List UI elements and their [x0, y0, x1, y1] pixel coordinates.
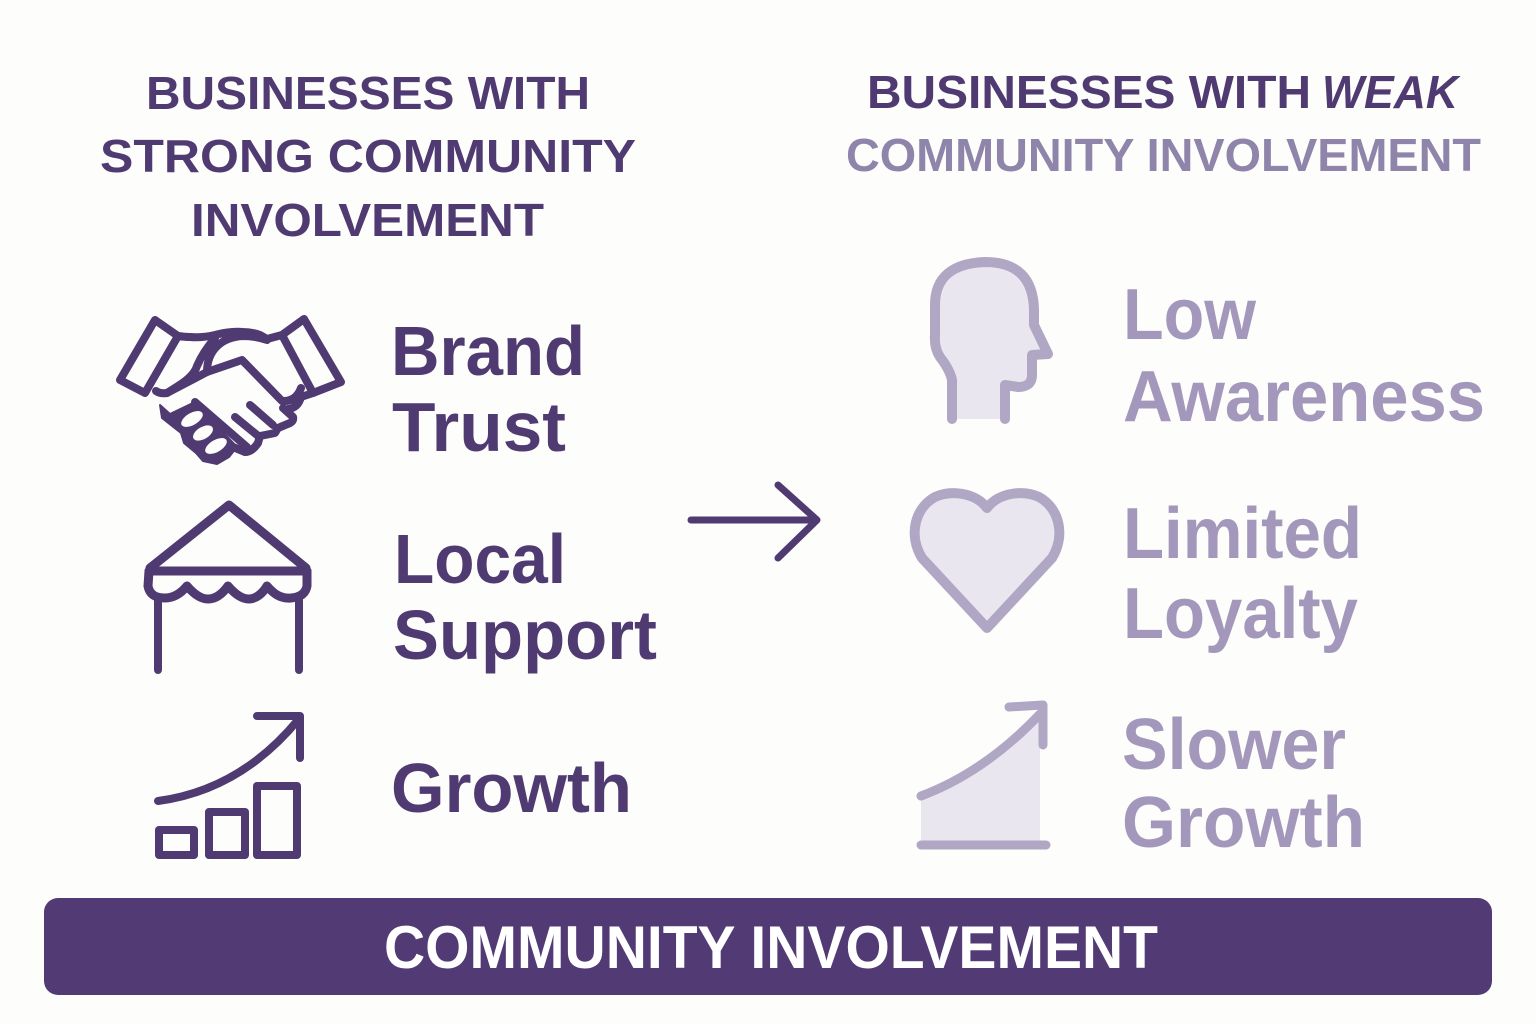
label: slower growth [1122, 705, 1365, 863]
label: low awareness: Awareness [1123, 357, 1485, 437]
icon: growth chart [158, 716, 300, 855]
label: brand trust [391, 312, 585, 466]
heading: strong involvement: INVOLVEMENT [191, 194, 544, 246]
label: limited loyalty: Limited [1123, 494, 1362, 574]
label: local support: Local [394, 520, 566, 598]
panel: strong community involvement [100, 67, 657, 855]
heading: weak involvement: COMMUNITY INVOLVEMENT [846, 129, 1481, 181]
label: limited loyalty: Loyalty [1123, 574, 1358, 654]
label: brand trust: Brand [391, 312, 585, 390]
icon: heart [915, 493, 1059, 628]
label: local support: Support [393, 596, 657, 674]
heading: weak involvement: BUSINESSES WITH [867, 66, 1311, 118]
heading: weak involvement [846, 66, 1481, 181]
banner: community involvement [44, 898, 1492, 995]
icon: handshake [120, 319, 341, 464]
label: slower growth: Growth [1122, 783, 1365, 863]
label: brand trust: Trust [392, 388, 566, 466]
arrow: strong to weak [691, 485, 817, 558]
heading: weak involvement: WEAK [1322, 66, 1461, 118]
label: limited loyalty [1123, 494, 1362, 654]
label: growth: Growth [391, 749, 632, 827]
label: slower growth: Slower [1122, 705, 1346, 785]
heading: strong involvement: BUSINESSES WITH [146, 67, 590, 119]
panel: weak community involvement [846, 66, 1485, 863]
label: low awareness [1123, 275, 1485, 437]
icon: market tent [148, 505, 307, 670]
heading: strong involvement [100, 67, 636, 246]
heading: strong involvement: STRONG COMMUNITY [100, 130, 636, 182]
banner: community involvement: COMMUNITY INVOLVEMENT [384, 914, 1158, 981]
icon: head profile [935, 262, 1048, 419]
icon: slow growth chart [921, 705, 1046, 845]
label: local support [393, 520, 657, 674]
label: low awareness: Low [1123, 275, 1257, 355]
